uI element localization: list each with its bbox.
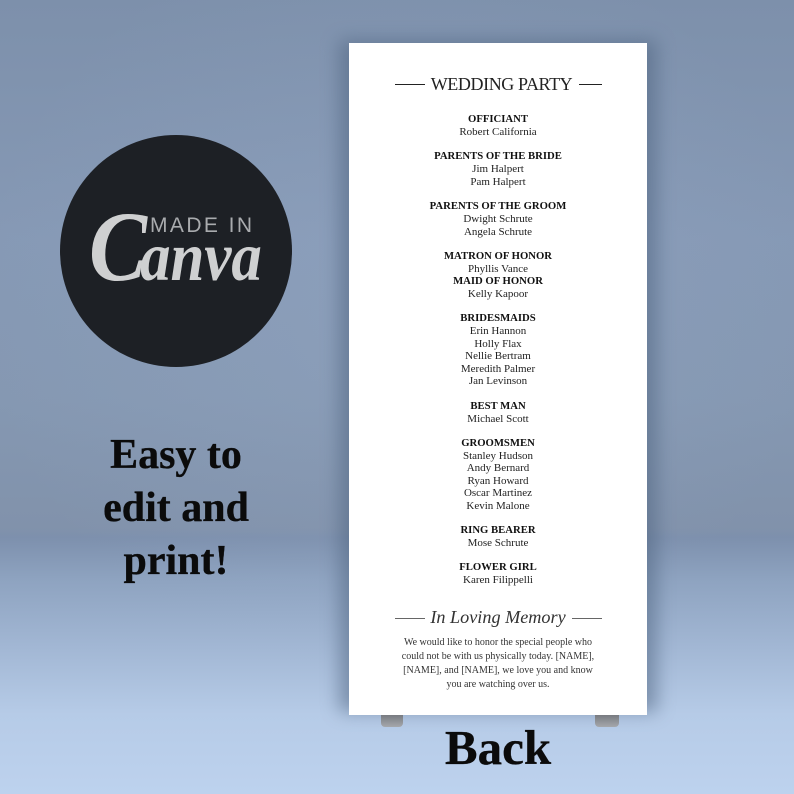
text block: wedding party names: Jim Halpert xyxy=(472,163,524,175)
panel: program card xyxy=(349,43,647,715)
text block: wedding party names: GROOMSMEN xyxy=(461,437,535,449)
stand foot left xyxy=(381,714,403,727)
text block: wedding party names: Angela Schrute xyxy=(464,226,532,238)
text block: memorial message: We would like to honor the special people who xyxy=(404,637,592,648)
text block: memorial message xyxy=(402,637,594,690)
text block: wedding party names: Erin Hannon xyxy=(470,325,526,337)
badge: made in canva: MADE IN xyxy=(150,214,252,237)
text block: wedding party names: Stanley Hudson xyxy=(463,450,533,462)
text block: wedding party names: Holly Flax xyxy=(474,338,522,350)
callout: easy to edit and print: edit and xyxy=(103,485,249,531)
text block: wedding party names: Mose Schrute xyxy=(468,537,528,549)
text block: wedding party names: RING BEARER xyxy=(460,524,536,536)
text block: memorial message: you are watching over us. xyxy=(446,679,550,690)
label: back: Back xyxy=(445,720,551,775)
text block: wedding party names: Karen Filippelli xyxy=(463,574,533,586)
text block: wedding party names: Andy Bernard xyxy=(467,462,529,474)
text block: wedding party names: MAID OF HONOR xyxy=(453,275,543,287)
text block: wedding party names: Meredith Palmer xyxy=(461,363,535,375)
text block: wedding party names: BEST MAN xyxy=(470,400,526,412)
text block: wedding party names: Kevin Malone xyxy=(466,500,530,512)
badge: made in canva: Canva xyxy=(89,191,262,302)
text block: wedding party names: Jan Levinson xyxy=(469,375,527,387)
callout: easy to edit and print xyxy=(103,432,249,584)
text block: wedding party names: Michael Scott xyxy=(467,413,529,425)
text block: wedding party names xyxy=(430,113,566,586)
text block: memorial message: [NAME], and [NAME], we love you and know xyxy=(403,665,593,676)
text block: wedding party names: Nellie Bertram xyxy=(465,350,531,362)
text block: wedding party names: PARENTS OF THE BRIDE xyxy=(434,150,562,162)
text block: wedding party names: Pam Halpert xyxy=(470,176,526,188)
text block: wedding party names: Dwight Schrute xyxy=(463,213,533,225)
text block: wedding party names: Oscar Martinez xyxy=(464,487,532,499)
stand foot right xyxy=(595,714,619,727)
text block: wedding party names: Ryan Howard xyxy=(468,475,528,487)
text block: wedding party names: MATRON OF HONOR xyxy=(444,250,552,262)
callout: easy to edit and print: Easy to xyxy=(110,432,242,478)
text block: wedding party names: OFFICIANT xyxy=(468,113,528,125)
text block: wedding party names: BRIDESMAIDS xyxy=(460,312,536,324)
text block: wedding party names: FLOWER GIRL xyxy=(459,561,537,573)
text block: wedding party names: PARENTS OF THE GROOM xyxy=(430,200,566,212)
text block: wedding party names: Robert California xyxy=(459,126,537,138)
callout: easy to edit and print: print! xyxy=(124,538,228,584)
text block: wedding party names: Phyllis Vance xyxy=(468,263,528,275)
heading: wedding party: WEDDING PARTY xyxy=(431,74,572,94)
badge: made in canva xyxy=(60,135,292,367)
card shadow xyxy=(339,40,657,712)
text block: wedding party names: Kelly Kapoor xyxy=(468,288,528,300)
heading: in loving memory: In Loving Memory xyxy=(430,607,566,627)
text block: memorial message: could not be with us physically today. [NAME], xyxy=(402,651,594,662)
